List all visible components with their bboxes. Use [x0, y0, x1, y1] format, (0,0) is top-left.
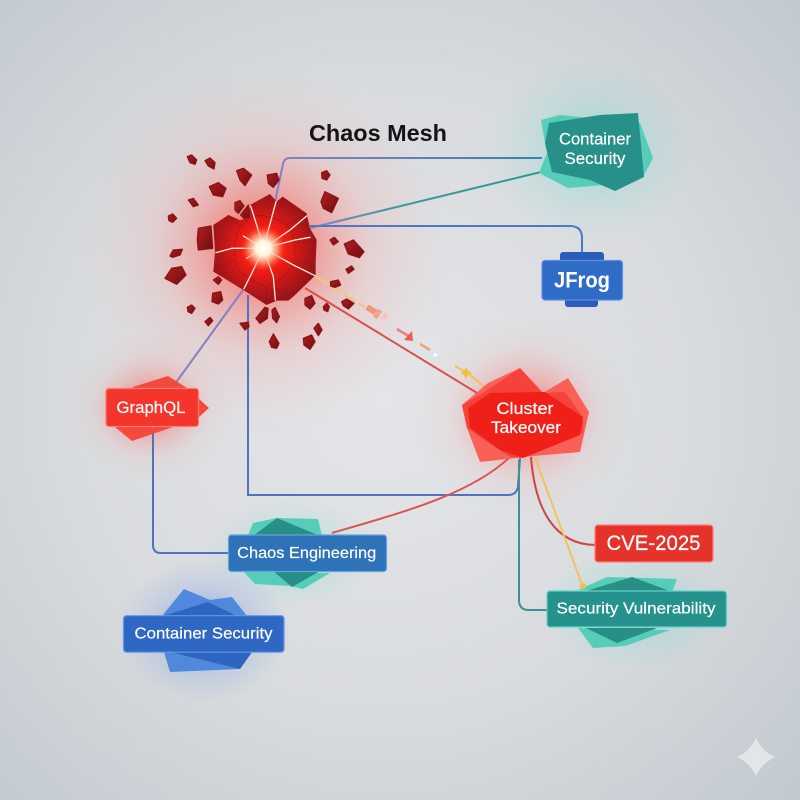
- node: Cluster Takeover: Cluster: [496, 400, 554, 418]
- node: JFrog: [542, 252, 622, 307]
- node: GraphQL: GraphQL: [116, 398, 186, 417]
- node: Cluster Takeover: [462, 368, 589, 462]
- node: Chaos Engineering: [228, 518, 386, 589]
- dashed attack arrow: [315, 276, 492, 396]
- icon: shattered hub: [165, 155, 364, 349]
- node: Container Security (blue): Container Security: [134, 626, 272, 642]
- node: Container Security (teal): Security: [564, 150, 626, 168]
- node: CVE-2025: CVE-2025: [606, 532, 700, 555]
- connector lines: [153, 158, 596, 610]
- node: Security Vulnerability: Security Vulnerability: [556, 600, 716, 618]
- node: Container Security (blue): [124, 589, 284, 672]
- node: CVE-2025: [595, 525, 713, 562]
- node: Security Vulnerability: [547, 577, 726, 648]
- title: Chaos Mesh: [309, 120, 447, 146]
- icon: sparkle: [737, 738, 775, 776]
- node: Container Security (teal): Container: [559, 130, 632, 148]
- node: GraphQL: [106, 376, 209, 441]
- node: Container Security (teal): [539, 113, 653, 191]
- node: JFrog: JFrog: [554, 268, 610, 292]
- node: Cluster Takeover: Takeover: [491, 419, 562, 437]
- node: Chaos Engineering: Chaos Engineering: [237, 545, 376, 562]
